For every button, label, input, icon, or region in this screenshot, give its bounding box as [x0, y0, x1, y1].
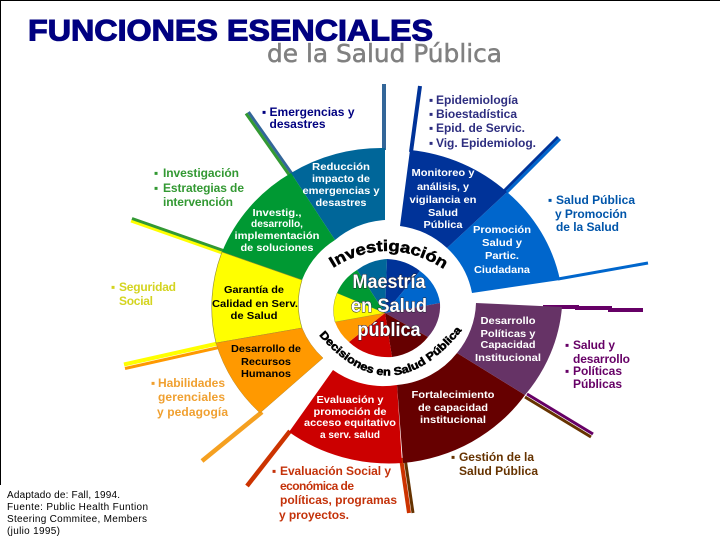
label: evaluacion [304, 394, 396, 441]
label: monitoreo [410, 167, 476, 231]
callout: habilidades: Habilidades [158, 376, 225, 390]
callout: investigacion: ▪ [154, 166, 158, 180]
sector: monitoreo [400, 150, 507, 248]
arrow: evaluacion social ray [247, 431, 290, 486]
label: desarrollo politicas: Políticas y [480, 328, 536, 340]
label: fortalecimiento [412, 389, 494, 426]
callout: investigacion [154, 166, 244, 209]
callout: gestion: Gestión de la [459, 450, 534, 464]
sector: desarrollo politicas [457, 303, 562, 395]
label: recursos humanos: Desarrollo de [231, 343, 301, 355]
callout: evaluacion social: y proyectos. [279, 508, 349, 522]
ring text: investigacion: Investigación [328, 240, 446, 269]
callout: seguridad: Social [119, 294, 153, 308]
label: promocion: Promoción [473, 224, 531, 236]
arrow: promocion upper ray [504, 137, 560, 193]
callout: epidemiologia: Epidemiología [436, 93, 518, 107]
source note: Steering Commitee, Members [7, 514, 147, 525]
callout: emergencias: Emergencias y [270, 105, 355, 119]
label: investig: Investig., [252, 207, 302, 219]
source note: Fuente: Public Health Funtion [7, 502, 148, 513]
callout: evaluacion social [272, 464, 397, 522]
label: monitoreo: vigilancia en [410, 194, 476, 206]
callout: evaluacion social: Evaluación Social y [280, 464, 391, 478]
source note: (julio 1995) [7, 526, 60, 537]
callout: epidemiologia [429, 93, 536, 150]
callout: epidemiologia: Epid. de Servic. [436, 121, 525, 135]
center label: en Salud [351, 296, 427, 317]
center label: Maestría [352, 272, 426, 293]
callout: emergencias [262, 105, 355, 131]
title: de la Salud Pública [267, 39, 502, 68]
callout: salud y desarrollo: Públicas [573, 377, 622, 391]
label: desarrollo politicas: Institucional [475, 352, 541, 364]
callout: gestion: ▪ [451, 450, 455, 464]
label: desarrollo politicas [475, 315, 541, 364]
source note: Adaptado de: Fall, 1994. [7, 490, 120, 501]
title: FUNCIONES ESENCIALES [28, 14, 433, 48]
label: evaluacion: a serv. salud [320, 429, 380, 441]
callout: gestion [451, 450, 538, 478]
label: garantia: Calidad en Serv. [212, 298, 298, 310]
sector: promocion [447, 192, 560, 293]
label: fortalecimiento: Fortalecimiento [412, 389, 494, 401]
sector: fortalecimiento [397, 353, 525, 463]
label: reduccion: desastres [316, 197, 367, 209]
sector: reduccion [291, 148, 385, 240]
callout: investigacion: ▪ [154, 181, 158, 195]
sector: investigacion [222, 173, 335, 280]
callout: salud publica y promocion [548, 193, 635, 234]
label: promocion: Partic. [485, 250, 519, 262]
arrow: habilidades ray [202, 412, 262, 461]
callout: salud y desarrollo [565, 338, 630, 391]
callout: gestion: Salud Pública [459, 464, 538, 478]
callout: habilidades [151, 376, 228, 419]
label: investig: implementación [234, 230, 320, 242]
arrow: salud y desarrollo lower ray [525, 394, 593, 437]
callout: epidemiologia: Vig. Epidemiolog. [436, 136, 536, 150]
label: reduccion: emergencias y [302, 185, 380, 197]
callout: evaluacion social: políticas, programas [280, 493, 397, 507]
arrow: promocion lower ray [558, 263, 648, 279]
ring text: decisiones: Decisiones en Salud Pública [319, 328, 462, 376]
callout: emergencias: desastres [270, 117, 326, 131]
label: promocion: Salud y [482, 237, 522, 249]
label: reduccion: Reducción [312, 161, 370, 173]
label: evaluacion: acceso equitativo [304, 417, 396, 429]
arrow: gestion ray [401, 458, 413, 513]
label: investig: de soluciones [240, 242, 314, 254]
label: desarrollo politicas: Desarrollo [480, 315, 536, 327]
callout: seguridad: Seguridad [119, 280, 176, 294]
arrow: politicas ray [543, 307, 643, 310]
panel: inner pie [333, 259, 440, 357]
callout: evaluacion social: ▪ [272, 464, 276, 478]
callout: habilidades: ▪ [151, 376, 155, 390]
callout: emergencias: ▪ [262, 105, 266, 119]
callout: evaluacion social: económica de [280, 479, 354, 493]
callout: investigacion: Investigación [163, 166, 239, 180]
label: evaluacion: promoción de [314, 406, 387, 418]
callout: salud publica y promocion: Salud Pública [556, 193, 635, 207]
center label: pública [358, 320, 421, 341]
callout: epidemiologia: ▪ [429, 136, 433, 150]
label: garantia: de Salud [230, 310, 278, 322]
label: recursos humanos: Humanos [241, 368, 291, 380]
callout: epidemiologia: ▪ [429, 107, 433, 121]
callout: salud y desarrollo: Salud y [573, 338, 615, 352]
label: investig [234, 207, 320, 254]
sector: evaluacion [289, 370, 402, 463]
arrow: investigacion ray [131, 218, 229, 255]
arrow: seguridad ray [124, 343, 221, 368]
label: recursos humanos [231, 343, 301, 380]
label: reduccion: impacto de [312, 173, 370, 185]
source note [7, 490, 148, 537]
label: monitoreo: Monitoreo y [412, 167, 475, 179]
callout: investigacion: intervención [163, 195, 233, 209]
callout: seguridad: ▪ [111, 280, 115, 294]
label: investig: desarrollo, [251, 218, 303, 230]
arrow: emergencias ray [246, 84, 384, 178]
sector: recursos humanos [216, 328, 323, 413]
callout: salud y desarrollo: ▪ [565, 364, 569, 378]
callout: habilidades: y pedagogía [157, 405, 228, 419]
label: fortalecimiento: de capacidad [418, 402, 488, 414]
callout: seguridad [111, 280, 176, 308]
label: reduccion [302, 161, 380, 209]
label: desarrollo politicas: Capacidad [480, 339, 536, 351]
callout: salud publica y promocion: de la Salud [556, 220, 619, 234]
callout: salud y desarrollo: desarrollo [573, 352, 630, 366]
callout: investigacion: Estrategias de [163, 181, 244, 195]
label: promocion [473, 224, 531, 276]
callout: salud y desarrollo: Políticas [573, 364, 622, 378]
label: garantia: Garantía de [224, 284, 284, 296]
label: recursos humanos: Recursos [241, 356, 291, 368]
label: monitoreo: análisis, y [417, 181, 469, 193]
title [28, 14, 502, 68]
arrow: epidemiologia ray [411, 86, 420, 152]
panel: outer wheel [212, 148, 562, 463]
label: evaluacion: Evaluación y [316, 394, 384, 406]
callout: salud publica y promocion: y Promoción [555, 207, 627, 221]
center label [351, 272, 427, 341]
label: fortalecimiento: institucional [420, 414, 486, 426]
callout: epidemiologia: ▪ [429, 93, 433, 107]
callout: salud y desarrollo: ▪ [565, 338, 569, 352]
label: monitoreo: Pública [424, 219, 463, 231]
label: promocion: Ciudadana [474, 264, 530, 276]
label: monitoreo: Salud [428, 207, 458, 219]
callout: salud publica y promocion: ▪ [548, 193, 552, 207]
label: garantia [212, 284, 298, 322]
callout: epidemiologia: ▪ [429, 121, 433, 135]
callout: habilidades: gerenciales [158, 390, 225, 404]
sector: garantia [212, 252, 302, 343]
callout: epidemiologia: Bioestadística [436, 107, 517, 121]
